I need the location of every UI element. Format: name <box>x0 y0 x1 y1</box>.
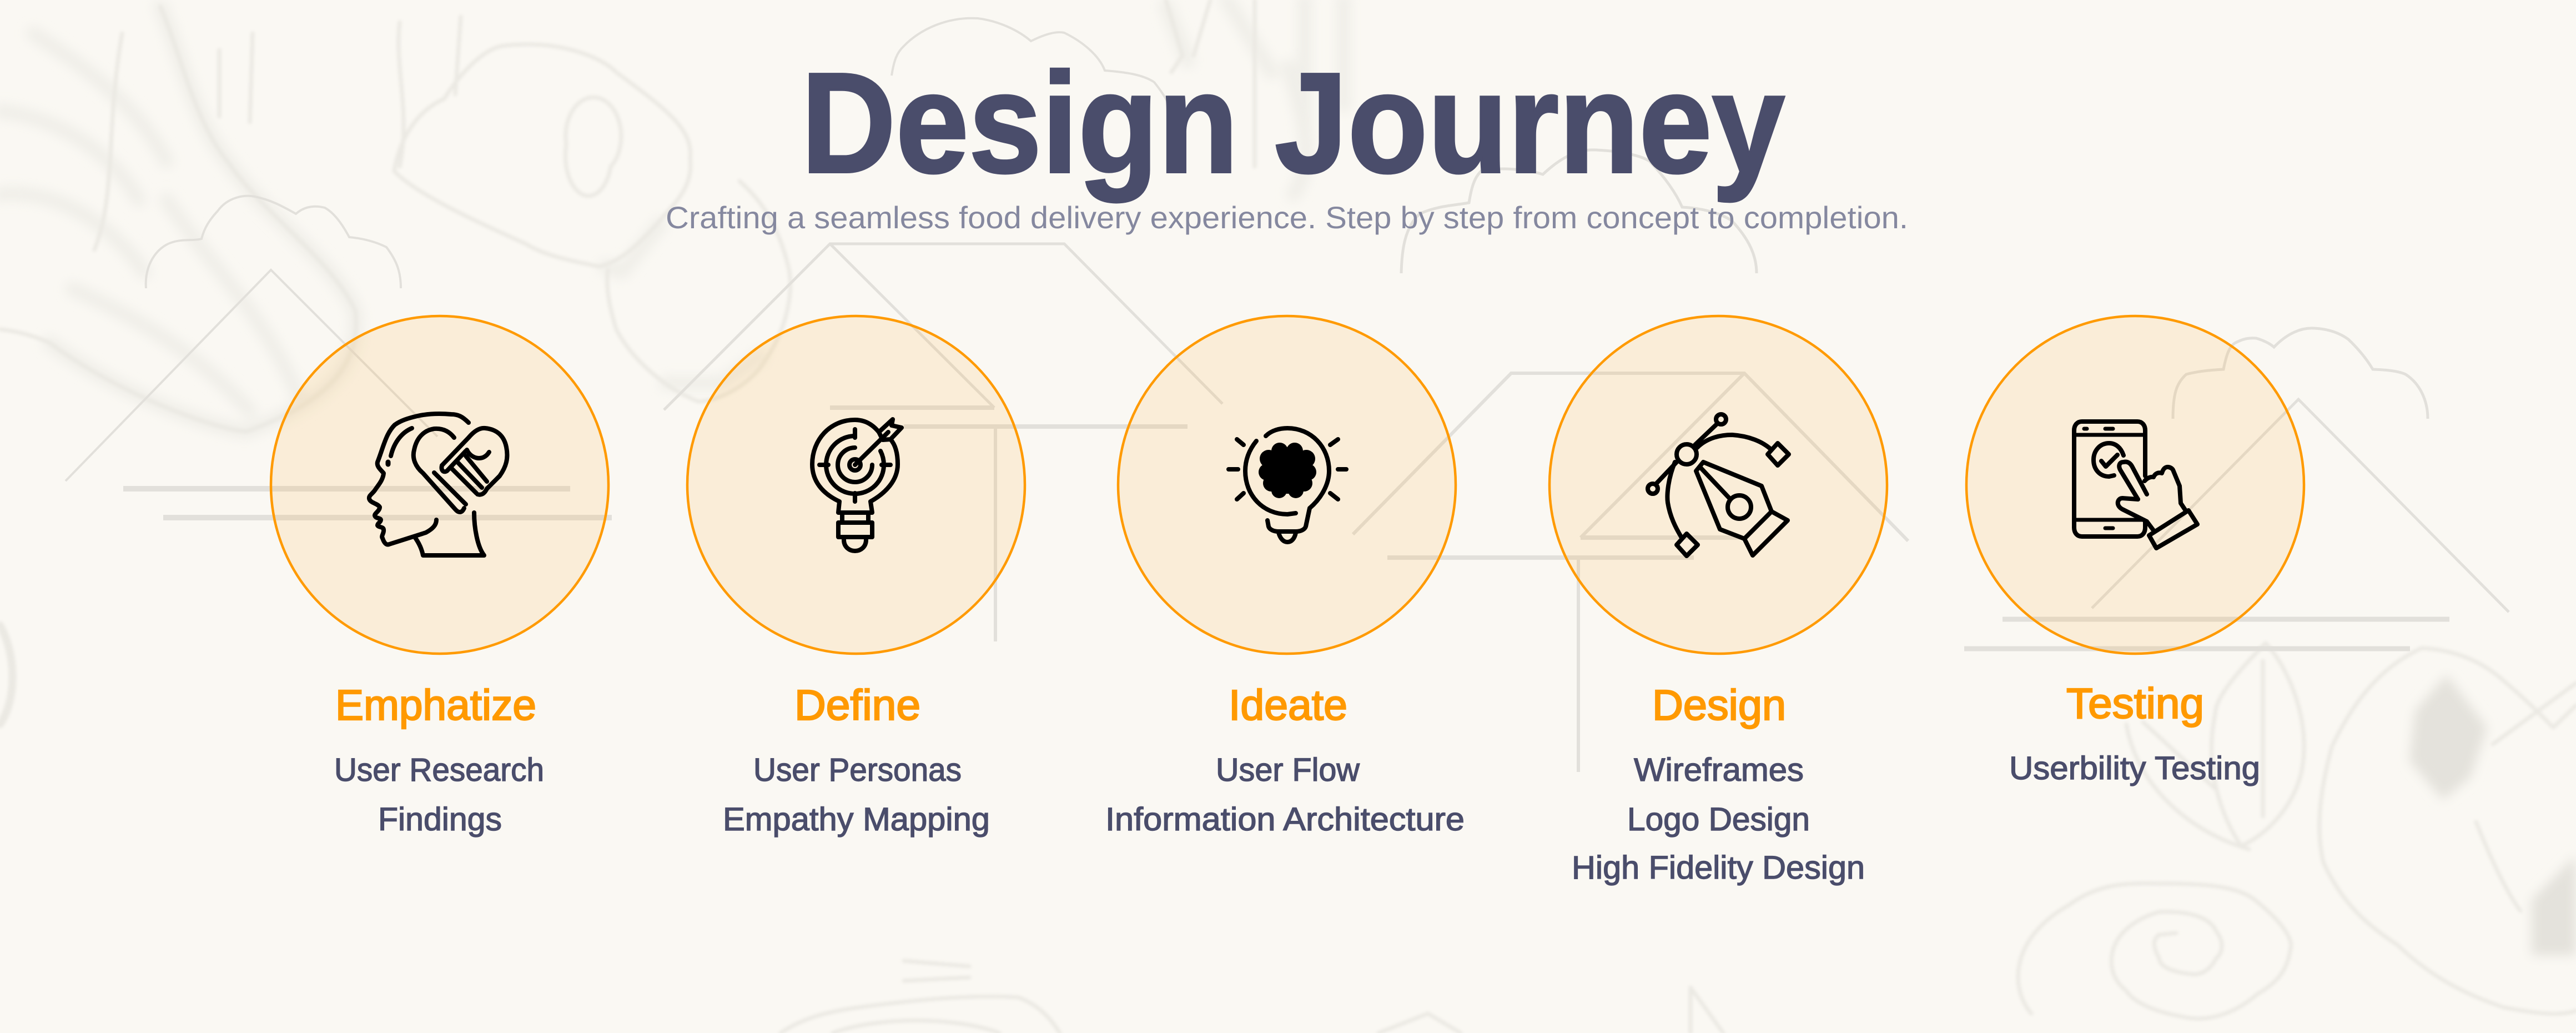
heading: Design: Design <box>1652 681 1786 729</box>
text: Findings: Findings <box>378 801 502 838</box>
step: Ideate <box>1105 316 1465 838</box>
text: High Fidelity Design: High Fidelity Design <box>1572 850 1865 886</box>
circle: Ideate <box>1118 316 1456 654</box>
step: Testing <box>1966 316 2304 786</box>
icon: lightbulb with brain <box>1229 428 1346 542</box>
heading: Ideate: Ideate <box>1229 681 1347 729</box>
text: Information Architecture: Information Architecture <box>1105 801 1465 838</box>
circle: Emphatize <box>271 316 608 654</box>
circle: Design <box>1549 316 1887 654</box>
icon: pen tool <box>1648 414 1789 556</box>
text: User Flow: User Flow <box>1216 752 1360 788</box>
background: tents and clouds line art <box>66 18 2509 772</box>
text: Logo Design: Logo Design <box>1627 801 1810 838</box>
text: Wireframes: Wireframes <box>1634 752 1804 788</box>
title: Design Journey <box>801 43 1785 203</box>
heading: Define: Define <box>794 681 920 729</box>
circle: Define <box>687 316 1025 654</box>
heading: Emphatize: Emphatize <box>335 681 536 729</box>
icon: bulb with target and arrow <box>812 419 902 551</box>
step: Design <box>1549 316 1887 886</box>
icon: head with handshake heart <box>369 414 507 555</box>
text: User Personas: User Personas <box>753 752 962 788</box>
icon: phone with tapping hand <box>2074 422 2197 548</box>
circle: Testing <box>1966 316 2304 654</box>
text: Userbility Testing: Userbility Testing <box>2009 750 2260 786</box>
text: User Research: User Research <box>334 752 544 788</box>
text: Empathy Mapping: Empathy Mapping <box>723 801 990 838</box>
heading: Testing: Testing <box>2066 680 2204 728</box>
step: Define <box>687 316 1025 838</box>
step: Emphatize <box>271 316 608 838</box>
subtitle: Crafting a seamless food delivery experience. Step by step from concept to completion. <box>666 200 1908 235</box>
